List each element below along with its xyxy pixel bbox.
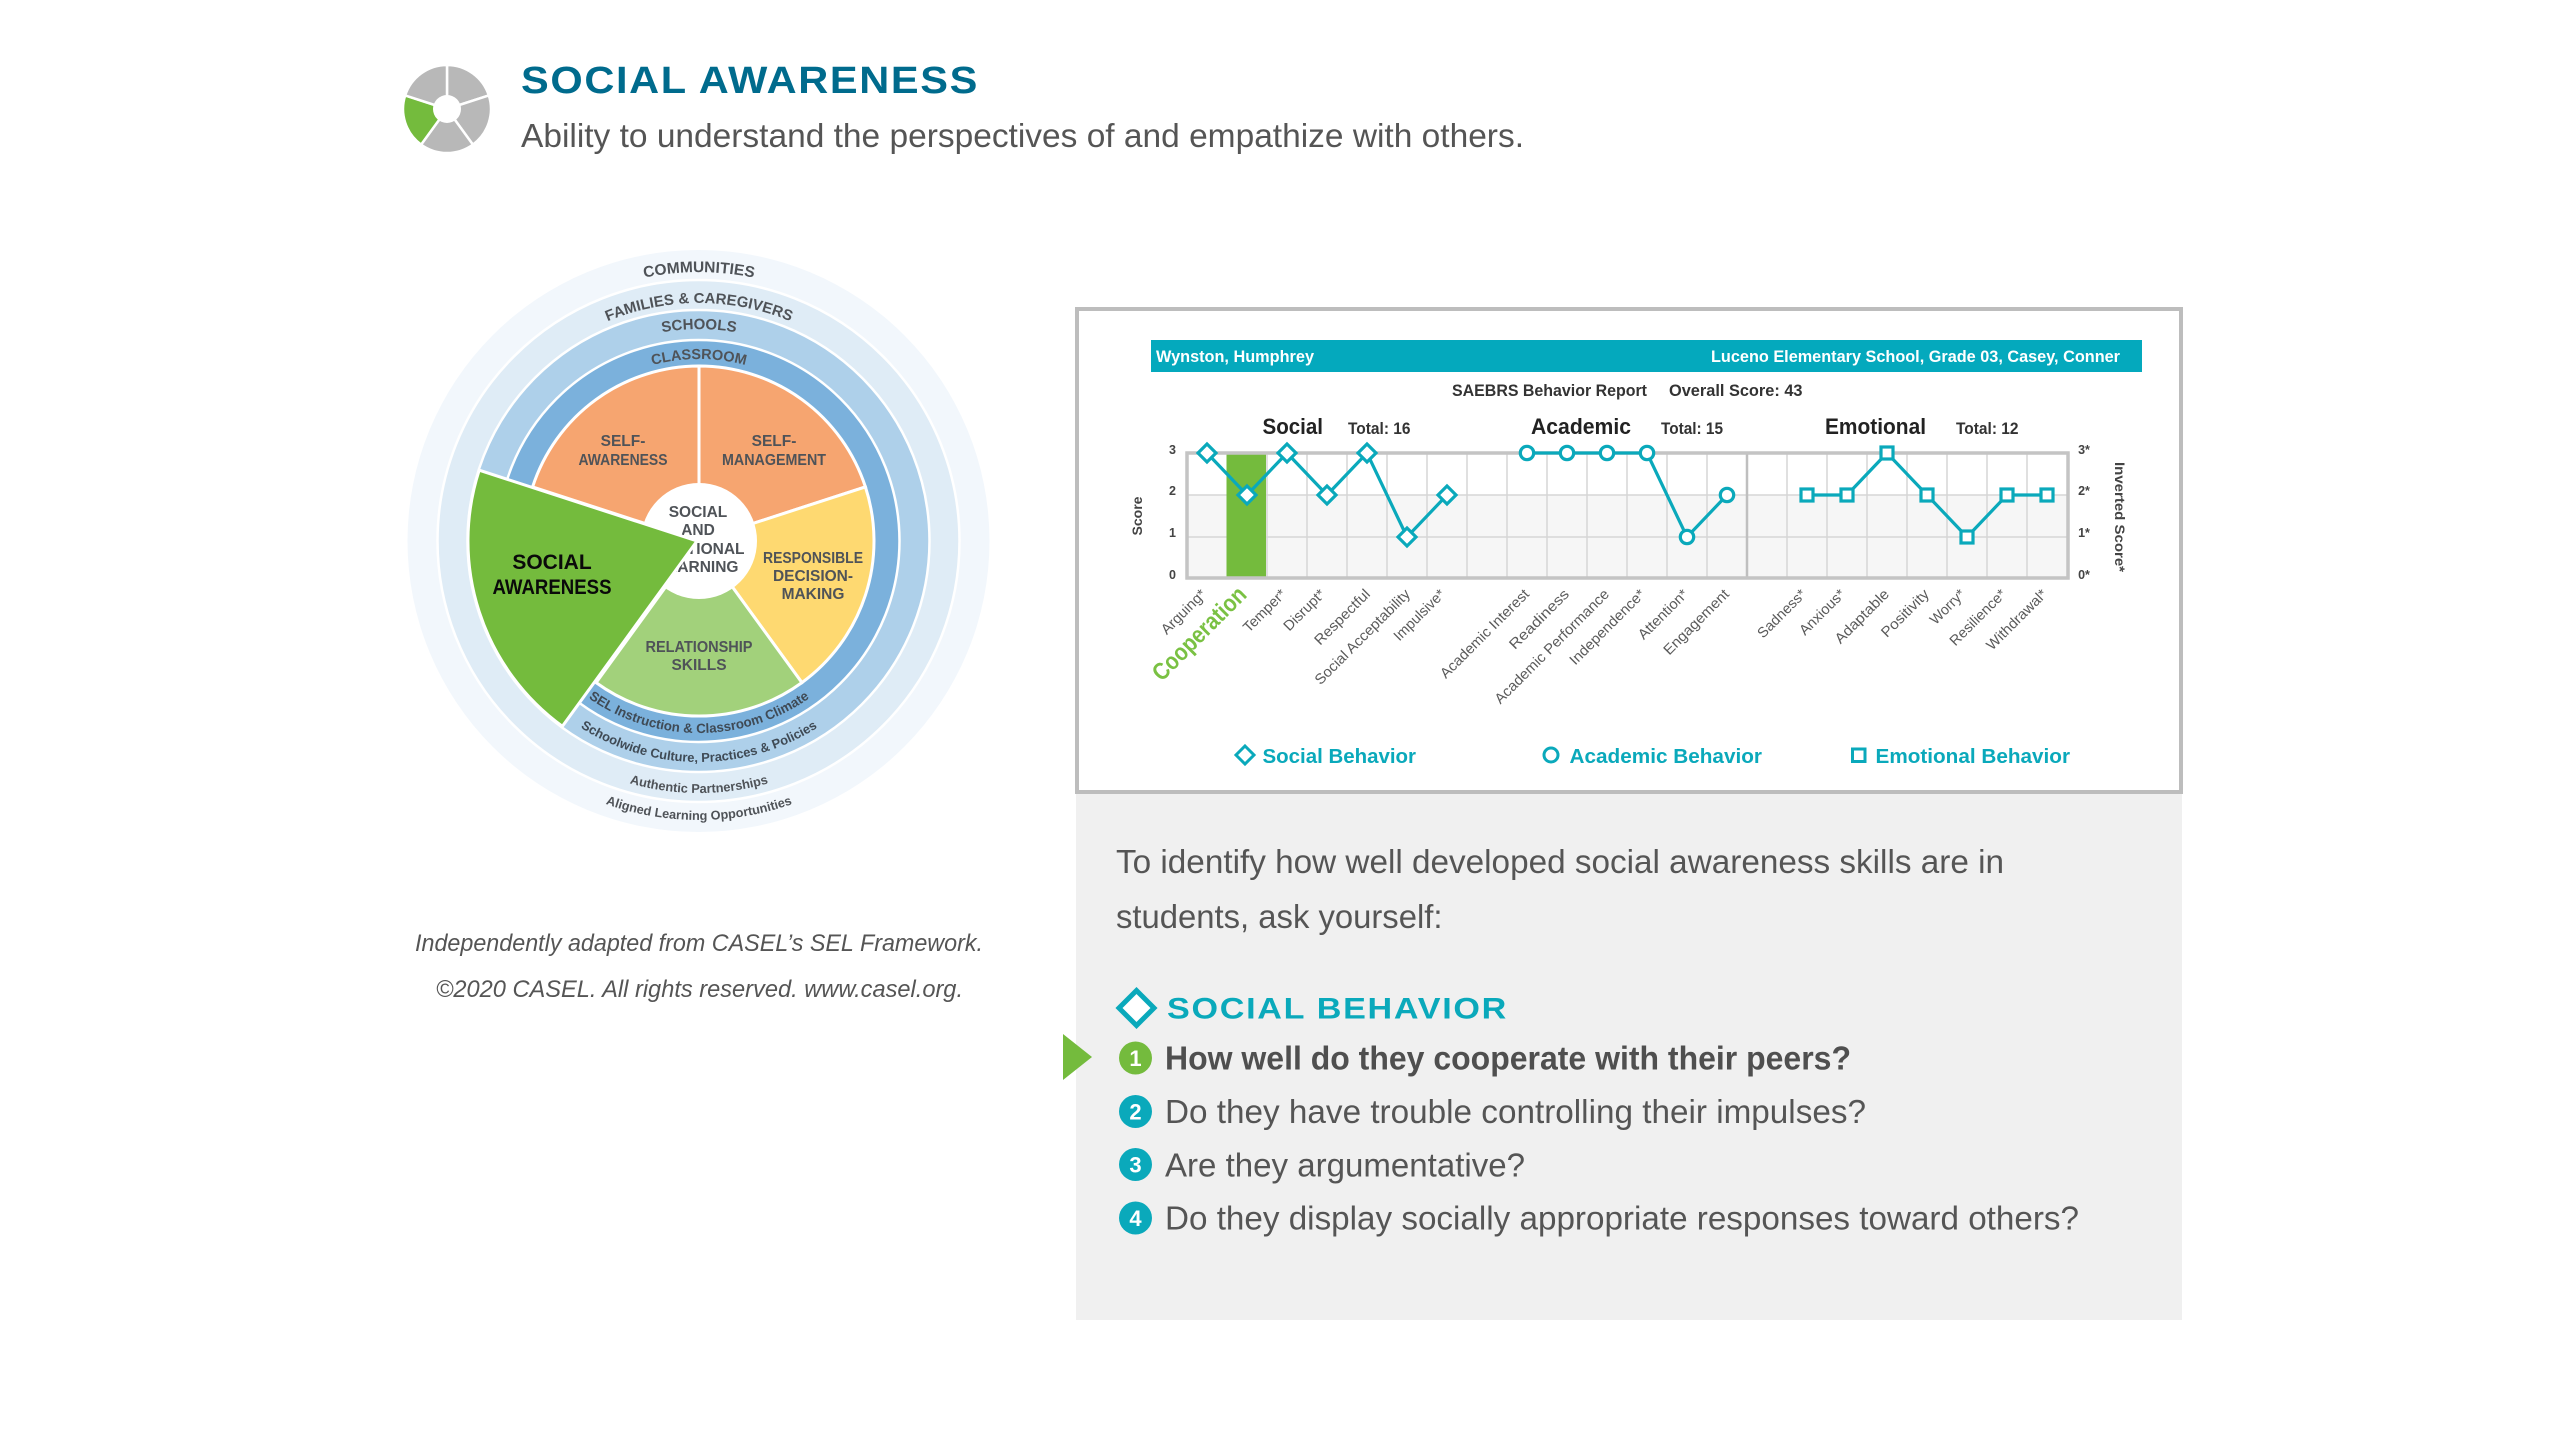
intro text (1116, 843, 2004, 935)
axis labels: 1* (2078, 526, 2090, 540)
ring labels: Authentic Partnerships (630, 776, 768, 794)
x-axis item labels: Anxious* (1797, 586, 1849, 639)
wedge labels: AWARENESS (578, 452, 668, 469)
concentric rings (408, 250, 990, 832)
x-axis item labels: Adaptable (1832, 587, 1893, 647)
x-axis item labels: Temper* (1240, 586, 1290, 636)
wedge labels: SELF- (601, 433, 645, 450)
wedge labels: MAKING (782, 586, 844, 603)
wedge: relationship skills (596, 541, 802, 716)
question 4: Do they display socially appropriate responses toward others? (1165, 1200, 2079, 1236)
SEL framework wheel (408, 250, 990, 832)
x-axis item labels: Attention* (1635, 586, 1692, 643)
x-axis item labels: Independence* (1567, 586, 1649, 669)
series: social behavior (1198, 444, 1456, 546)
wedge labels: DECISION- (773, 568, 853, 585)
intro text: students, ask yourself: (1116, 898, 1442, 935)
ring labels: CLASSROOM (652, 348, 747, 365)
subtitle: Ability to understand the perspectives of and empathize with others. (521, 117, 1524, 154)
arrow: highlighted question (1063, 1034, 1092, 1080)
x-axis item labels: Engagement (1661, 587, 1733, 659)
ring labels: COMMUNITIES (644, 261, 754, 277)
wedge labels: SKILLS (671, 657, 727, 674)
axis labels: 3 (1169, 443, 1176, 457)
question 2: Do they have trouble controlling their impulses? (1165, 1093, 1866, 1130)
highlighted wedge: social awareness: AWARENESS (492, 576, 612, 599)
ring labels: SEL Instruction & Classroom Climate (590, 692, 808, 734)
question 2: 2 (1129, 1100, 1142, 1124)
report header bar: Wynston, Humphrey (1156, 347, 1315, 366)
wedge labels: SELF- (752, 433, 796, 450)
x-axis item labels: Arguing* (1158, 586, 1210, 638)
section headings: Emotional (1825, 414, 1926, 439)
legend (1236, 746, 2070, 768)
centre hub: LEARNING (658, 559, 738, 576)
report title: SAEBRS Behavior Report (1452, 381, 1647, 400)
intro text: To identify how well developed social awareness skills are in (1116, 843, 2004, 880)
centre hub (641, 483, 757, 599)
question 3: Are they argumentative? (1165, 1146, 1525, 1184)
ring labels: SCHOOLS (662, 318, 736, 332)
section headings: Academic (1531, 414, 1631, 439)
ring labels (582, 261, 816, 823)
section headings: Total: 12 (1956, 419, 2018, 438)
axis labels: 2 (1169, 484, 1176, 498)
header (403, 60, 1524, 154)
attribution caption (415, 930, 983, 1003)
wedge labels: MANAGEMENT (722, 452, 826, 469)
x-axis item labels: Cooperation (1147, 581, 1252, 687)
x-axis item labels: Positivity (1878, 586, 1933, 641)
x-axis item labels: Social Acceptability (1312, 586, 1414, 688)
line chart (1129, 443, 2128, 707)
section headings: Total: 15 (1661, 419, 1723, 438)
report header bar: Luceno Elementary School, Grade 03, Casey, Conner (1711, 347, 2120, 366)
attribution caption: Independently adapted from CASEL’s SEL Framework. (415, 930, 983, 957)
x-axis item labels: Academic Performance (1492, 587, 1613, 707)
axis labels: 0* (2078, 568, 2090, 582)
axis labels: 0 (1169, 568, 1176, 582)
panel: SAEBRS report (1077, 309, 2181, 792)
x-axis item labels: Resilience* (1947, 586, 2010, 649)
x-axis item labels: Disrupt* (1281, 586, 1329, 635)
x-axis item labels: Academic Interest (1437, 587, 1533, 682)
wedge labels (578, 433, 863, 674)
question 3: 3 (1129, 1152, 1142, 1178)
section headings (1262, 414, 2018, 439)
heading: social behavior: SOCIAL BEHAVIOR (1167, 992, 1508, 1026)
wedge labels: RESPONSIBLE (763, 550, 863, 567)
legend: Academic Behavior (1570, 746, 1762, 768)
wedge: self-management (699, 366, 865, 541)
title: SOCIAL AWARENESS (521, 60, 979, 102)
panel: questions background (1076, 790, 2182, 1320)
section headings: Social (1262, 414, 1323, 439)
x-axis item labels: Sadness* (1755, 586, 1810, 642)
axis labels: 3* (2078, 443, 2090, 457)
x-axis item labels: Readiness (1506, 587, 1573, 653)
x-axis item labels: Impulsive* (1391, 586, 1449, 644)
x-axis item labels: Worry* (1927, 586, 1969, 628)
report title (1452, 381, 1802, 400)
wedge labels: RELATIONSHIP (646, 639, 752, 656)
attribution caption: ©2020 CASEL. All rights reserved. www.casel.org. (436, 976, 963, 1003)
question 4: 4 (1129, 1206, 1142, 1231)
section headings: Total: 16 (1348, 419, 1410, 438)
series: academic behavior (1520, 446, 1734, 544)
legend: Social Behavior (1262, 746, 1416, 768)
icon: SEL wheel with social awareness highlighted (403, 65, 491, 153)
axis labels: 2* (2078, 484, 2090, 498)
question 1: 1 (1129, 1046, 1142, 1071)
legend: Emotional Behavior (1876, 746, 2070, 768)
axis labels: Inverted Score* (2112, 462, 2128, 573)
plot area (1187, 453, 2068, 578)
ring labels: Aligned Learning Opportunities (606, 796, 792, 823)
axis labels: Score (1129, 496, 1145, 536)
axis labels (1129, 443, 2128, 582)
x-axis item labels (1147, 581, 2051, 707)
report header bar (1151, 340, 2142, 372)
ring labels: FAMILIES & CAREGIVERS (604, 292, 793, 321)
highlighted wedge: social awareness: SOCIAL (512, 551, 592, 574)
centre hub: AND (681, 522, 715, 539)
centre hub: EMOTIONAL (652, 541, 744, 558)
series: emotional behavior (1801, 447, 2053, 543)
wedge: self-awareness (533, 366, 699, 541)
x-axis item labels: Respectful (1312, 587, 1374, 649)
question 1: How well do they cooperate with their peers? (1165, 1040, 1851, 1076)
x-axis item labels: Withdrawal* (1984, 586, 2051, 654)
report title: Overall Score: 43 (1669, 381, 1802, 400)
highlighted wedge: social awareness (468, 470, 697, 726)
ring labels: Schoolwide Culture, Practices & Policies (582, 721, 816, 764)
wedge: responsible decision-making (699, 487, 874, 683)
centre hub: SOCIAL (669, 504, 727, 521)
axis labels: 1 (1169, 526, 1176, 540)
